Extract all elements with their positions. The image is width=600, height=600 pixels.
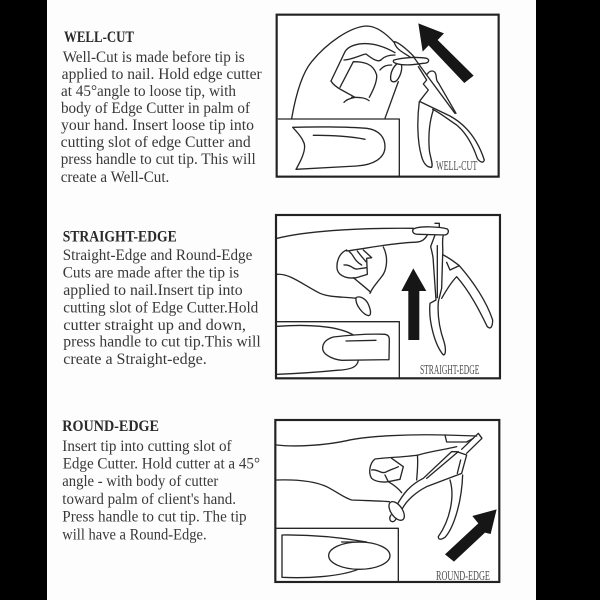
label: straight-edge: STRAIGHT-EDGE: [420, 362, 479, 377]
inset: straight-edge nail: [277, 322, 399, 377]
edge cutter tool: [413, 223, 493, 355]
heading: straight-edge: STRAIGHT-EDGE: [63, 229, 177, 246]
body text: well-cut: Well-Cut is made before tip is: [63, 49, 245, 66]
body text: well-cut: applied to nail. Hold edge cutter: [62, 66, 263, 83]
body text: straight-edge: create a Straight-edge.: [63, 351, 207, 368]
body text: straight-edge: [63, 247, 261, 368]
body text: well-cut: create a Well-Cut.: [61, 169, 169, 186]
body text: round-edge: Press handle to cut tip. The tip: [62, 509, 247, 526]
body text: round-edge: Edge Cutter. Hold cutter at a 45°: [63, 456, 260, 473]
arrow: well-cut direction: [418, 23, 474, 83]
inset: round-edge nail: [277, 528, 398, 581]
body text: round-edge: will have a Round-Edge.: [62, 526, 207, 543]
label: round-edge: ROUND-EDGE: [436, 568, 490, 583]
body text: round-edge: [62, 438, 260, 543]
hand holding cutter: [277, 435, 477, 502]
body text: well-cut: at 45°angle to loose tip, with: [61, 83, 236, 100]
edge cutter tool: [393, 57, 484, 167]
body text: straight-edge: Cuts are made after the tip is: [63, 265, 239, 282]
heading: well-cut: WELL-CUT: [64, 29, 135, 46]
body text: round-edge: toward palm of client's hand.: [62, 491, 236, 508]
body text: straight-edge: press handle to cut tip.This will: [63, 334, 261, 351]
panel: well-cut illustration: [277, 15, 499, 177]
inset: well-cut nail: [278, 119, 399, 176]
hand holding cutter: [277, 228, 427, 316]
arrow: straight-edge direction: [401, 268, 426, 340]
heading: round-edge: ROUND-EDGE: [62, 418, 159, 435]
edge cutter tool: [386, 433, 482, 539]
body text: well-cut: your hand. Insert loose tip into: [61, 117, 254, 134]
body text: well-cut: [61, 49, 263, 186]
label: well-cut: WELL-CUT: [436, 158, 477, 173]
section: well-cut text: [61, 29, 263, 186]
panel: straight-edge illustration: [276, 215, 500, 378]
body text: well-cut: body of Edge Cutter in palm of: [61, 100, 251, 117]
panel: round-edge illustration: [275, 420, 499, 583]
hand holding cutter: [292, 26, 418, 118]
body text: straight-edge: applied to nail.Insert tip into: [63, 282, 243, 299]
body text: well-cut: press handle to cut tip. This will: [61, 151, 256, 168]
body text: round-edge: Insert tip into cutting slot of: [62, 438, 232, 455]
body text: round-edge: angle - with body of cutter: [62, 473, 219, 490]
body text: straight-edge: cutter straight up and down,: [63, 317, 246, 334]
body text: straight-edge: cutting slot of Edge Cutter.Hold: [63, 300, 259, 317]
body text: straight-edge: Straight-Edge and Round-Edge: [63, 247, 252, 264]
body text: well-cut: cutting slot of edge Cutter and: [61, 134, 251, 151]
section: round-edge text: [62, 418, 260, 543]
section: straight-edge text: [63, 229, 261, 368]
arrow: round-edge direction: [445, 509, 497, 562]
